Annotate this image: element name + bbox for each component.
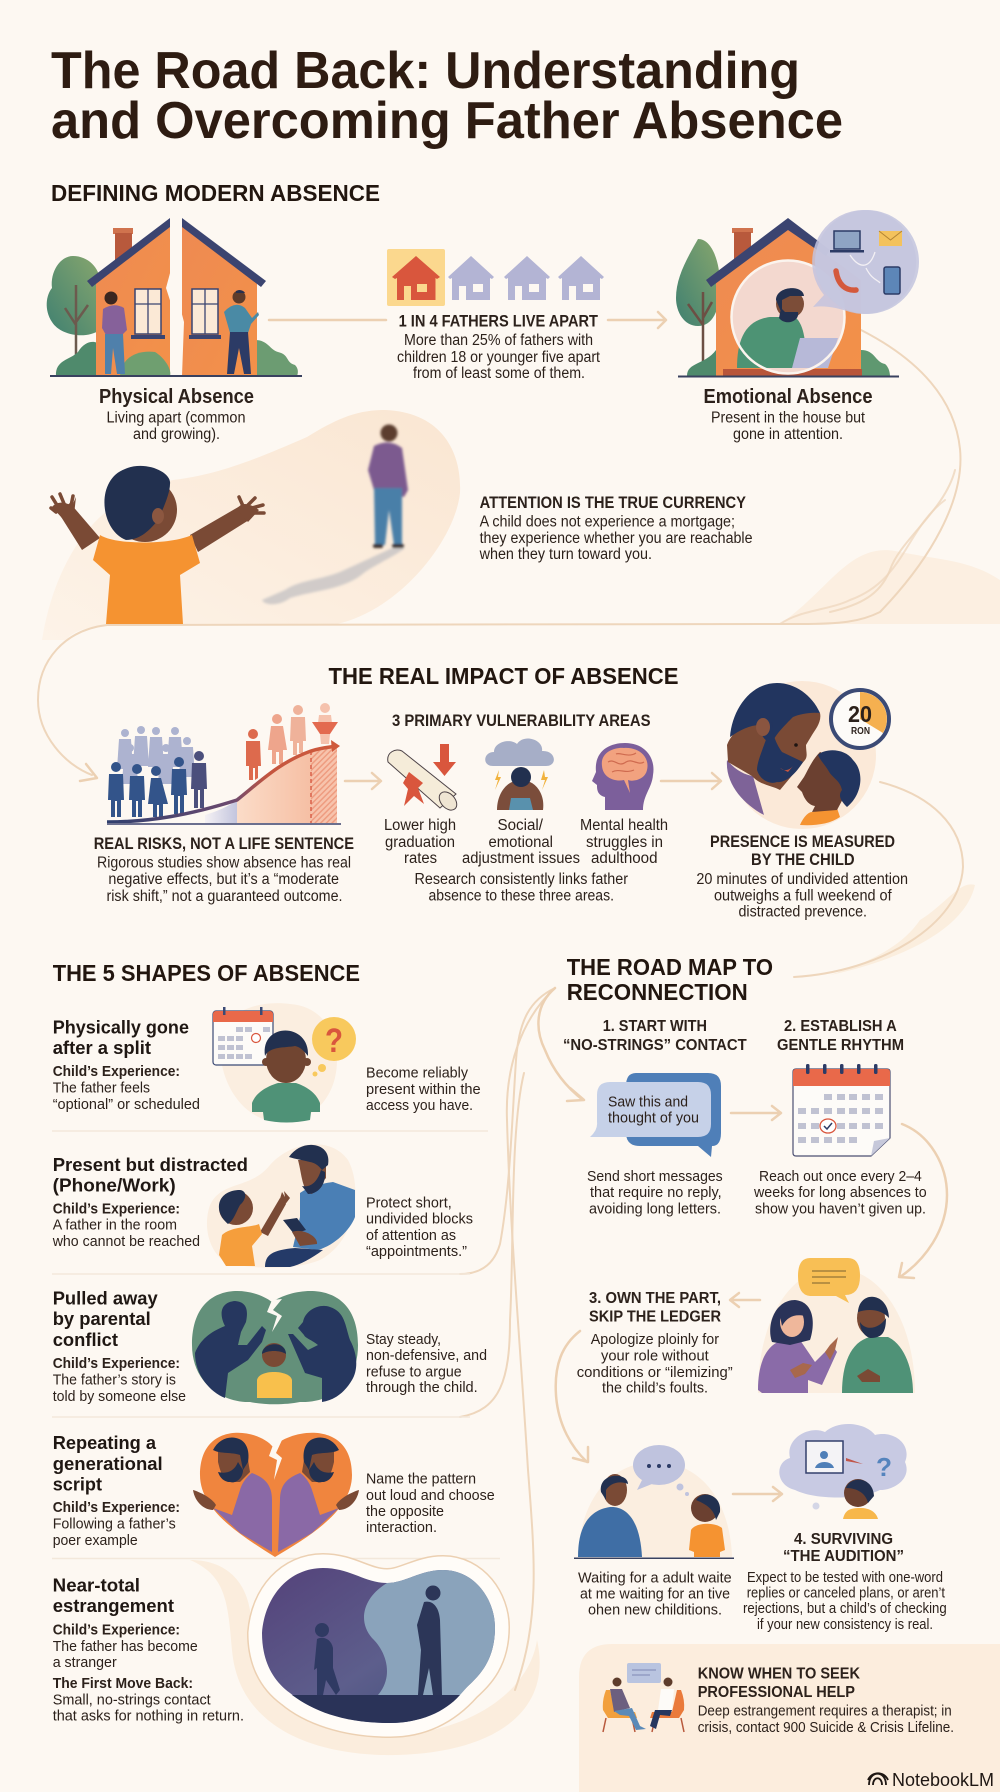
illustration: child reaching [51, 466, 264, 624]
label: emotional absence: gone in attention. [733, 426, 843, 443]
step 3 text: the child’s foults. [602, 1380, 708, 1397]
step 4 text: Expect to be tested with one-word [747, 1570, 943, 1586]
text: shape 3: conflict [53, 1329, 118, 1350]
step 3 [577, 1258, 915, 1397]
text: shape 5 [53, 1575, 244, 1724]
soft background shapes [190, 550, 1000, 1755]
child silhouette [314, 1623, 340, 1695]
step 4 heading [783, 1531, 904, 1565]
text: real risks: risk shift,” not a guaranteed outcome. [106, 888, 342, 905]
person left [102, 292, 127, 374]
thought bubble [312, 1017, 356, 1061]
help text [698, 1666, 954, 1736]
step 3 heading: 3. OWN THE PART, [589, 1290, 721, 1307]
icon: calendar [793, 1064, 890, 1156]
section: real impact [94, 663, 963, 977]
text: shape 1: after a split [53, 1037, 151, 1058]
text: shape 3: Pulled away [53, 1288, 158, 1309]
action text: shape 4 [366, 1470, 495, 1536]
text: shape 4: script [53, 1474, 102, 1494]
action text: shape 3: non-defensive, and [366, 1347, 487, 1364]
waiting text: ohen new childitions. [588, 1602, 722, 1618]
text: shape 2: A father in the room [53, 1217, 177, 1234]
step 4 text: rejections, but a child’s of checking [743, 1601, 947, 1617]
icon: phone [884, 267, 900, 294]
arrow to step 3 text [730, 1293, 760, 1307]
waiting text: Waiting for a adult waite [578, 1569, 732, 1586]
text: shape 3: The father’s story is [53, 1372, 176, 1389]
text: presence measured: 20 minutes of undivided attention [696, 871, 908, 888]
shape 2: present but distracted [52, 1144, 473, 1268]
arrow to step 4 [733, 1487, 782, 1501]
panel: professional help [579, 1644, 1000, 1792]
text: shape 4: generational [53, 1453, 163, 1474]
text: shape 5: Child’s Experience: [53, 1622, 180, 1639]
step 2 text [753, 1168, 927, 1217]
help text: crisis, contact 900 Suicide & Crisis Lifeline. [698, 1720, 954, 1736]
action text: shape 4: the opposite [366, 1503, 444, 1520]
text: presence measured: distracted prevence. [738, 904, 867, 921]
label: physical absence: Physical Absence [99, 386, 254, 408]
text: shape 4 [53, 1432, 180, 1549]
heading: RECONNECTION [567, 979, 748, 1005]
title: The Road Back: Understanding [51, 42, 800, 100]
label: physical absence [99, 386, 254, 443]
labels: vulnerability areas: emotional [488, 834, 553, 851]
illustration: walking away father [262, 424, 408, 604]
action text: shape 4: Name the pattern [366, 1470, 476, 1488]
stat text: More than 25% of fathers with [404, 332, 593, 349]
action text: shape 2: “appointments.” [366, 1243, 467, 1260]
step 2 text: Reach out once every 2–4 [759, 1168, 922, 1185]
illustration: child and calendar: ? [325, 1022, 343, 1060]
stat text: children 18 or younger five apart [397, 349, 601, 366]
shape 5: near-total estrangement [53, 1568, 495, 1724]
front crowd [108, 751, 207, 817]
icon: chat bubbles: Saw this and [608, 1093, 688, 1110]
labels: vulnerability areas: rates [404, 850, 437, 867]
step 2 text: weeks for long absences to [753, 1184, 927, 1201]
label: physical absence: Living apart (common [106, 410, 246, 426]
illustration: arguing parents [192, 1291, 358, 1404]
labels: vulnerability areas: adulthood [591, 850, 658, 867]
illustration: mirrored fathers in heart [193, 1433, 359, 1557]
text: shape 5: that asks for nothing in return. [53, 1707, 244, 1724]
icon: laptop [830, 231, 864, 252]
illustration: child imagining [779, 1424, 907, 1519]
waiting text: at me waiting for an tive [580, 1586, 730, 1603]
action text: shape 3: Stay steady, [366, 1331, 441, 1348]
labels: vulnerability areas: graduation [385, 834, 455, 851]
help text: PROFESSIONAL HELP [698, 1684, 855, 1701]
step 1 heading [563, 1018, 747, 1054]
icon: diploma [388, 744, 460, 813]
step 1 heading: “NO-STRINGS” CONTACT [563, 1037, 747, 1054]
text: shape 5: Near-total [53, 1575, 140, 1596]
road lines through left column [52, 988, 555, 1690]
text: shape 2: Child’s Experience: [53, 1200, 180, 1217]
waiting text [578, 1569, 732, 1618]
text: presence measured: outweighs a full weekend of [714, 888, 892, 905]
arrow to waiting illustration [556, 1331, 588, 1462]
text: shape 4: Following a father’s [53, 1516, 176, 1533]
text: shape 2: (Phone/Work) [53, 1175, 176, 1196]
step 4 [743, 1424, 947, 1633]
waiting illustration and text [574, 1445, 734, 1618]
text: presence measured: PRESENCE IS MEASURED [710, 832, 895, 851]
callout: attention [479, 493, 752, 563]
text: real risks [94, 834, 354, 905]
step 2 heading: 2. ESTABLISH A [784, 1018, 897, 1035]
illustration: father and child waiting [574, 1445, 734, 1559]
step 1 text [587, 1168, 723, 1217]
text: shape 4: Child’s Experience: [53, 1499, 180, 1516]
illustration: bubble house [676, 210, 919, 378]
chart: risk shift curve [107, 703, 341, 825]
step 2 heading [777, 1018, 904, 1054]
step 1 text: that require no reply, [590, 1184, 722, 1201]
step 4 text: if your new consistency is real. [757, 1617, 933, 1633]
illustration: child and calendar [213, 1003, 356, 1122]
illustration: child imagining: ? [876, 1452, 892, 1482]
icon: chat bubbles [590, 1073, 721, 1157]
step 3 heading: SKIP THE LEDGER [589, 1308, 721, 1326]
illustration: father and son with timer: 20 [848, 701, 872, 727]
labels: vulnerability areas: Mental health [580, 817, 668, 834]
section: road map [538, 954, 947, 1633]
step 3 heading [589, 1290, 721, 1326]
connector line [269, 319, 386, 321]
text: presence measured: BY THE CHILD [751, 850, 855, 869]
labels: vulnerability areas: absence to these three areas. [428, 888, 614, 905]
action text: shape 1: Become reliably [366, 1064, 468, 1082]
labels: vulnerability areas: Research consistently links father [414, 871, 628, 888]
labels: vulnerability areas [384, 817, 668, 905]
text: shape 5: The First Move Back: [53, 1675, 193, 1692]
text: shape 2: Present but distracted [53, 1154, 248, 1175]
heading: THE REAL IMPACT OF ABSENCE [328, 663, 678, 689]
stat text [397, 312, 601, 382]
road line to road map [794, 782, 963, 977]
icon: handset [836, 271, 856, 290]
step 1 text: Send short messages [587, 1168, 723, 1185]
text: real risks: Rigorous studies show absence has real [97, 855, 351, 872]
step 1 text: avoiding long letters. [589, 1200, 721, 1217]
text: shape 5: a stranger [53, 1654, 117, 1671]
father silhouette [417, 1586, 442, 1695]
icon: chat bubbles: thought of you [608, 1110, 699, 1127]
action text: shape 1 [366, 1064, 481, 1114]
step 2 [753, 1018, 927, 1217]
text: shape 5: The father has become [53, 1638, 198, 1655]
action text: shape 4: interaction. [366, 1519, 437, 1536]
help text: KNOW WHEN TO SEEK [698, 1666, 860, 1683]
heading: THE 5 SHAPES OF ABSENCE [53, 960, 360, 986]
text: shape 1: “optional” or scheduled [53, 1096, 200, 1113]
action text: shape 3: refuse to argue [366, 1363, 462, 1380]
shape 3: parental conflict [53, 1288, 487, 1405]
text: shape 5: Small, no-strings contact [53, 1692, 211, 1709]
shifted figures [246, 703, 338, 780]
title [51, 42, 843, 150]
action text: shape 2: Protect short, [366, 1194, 452, 1211]
text: shape 2: who cannot be reached [52, 1233, 200, 1250]
title: and Overcoming Father Absence [51, 92, 843, 150]
illustration: father and son with timer [727, 681, 889, 829]
label: physical absence: and growing). [133, 426, 220, 443]
illustration: couple talking [758, 1258, 915, 1393]
action text: shape 1: access you have. [366, 1097, 473, 1114]
section: 5 shapes [52, 960, 495, 1724]
text: shape 3: Child’s Experience: [53, 1355, 180, 1372]
sub heading: 3 PRIMARY VULNERABILITY AREAS [392, 711, 650, 730]
callout: attention: they experience whether you are reachable [480, 530, 752, 547]
action text: shape 2 [366, 1194, 473, 1260]
step 3 text: conditions or “ilemizing” [577, 1364, 733, 1381]
icon row: 1 in 4 houses [387, 249, 604, 306]
icon: storm cloud person [485, 738, 554, 810]
text: shape 1 [53, 1016, 200, 1113]
arrow to emotional absence [608, 312, 666, 328]
text: shape 1: Child’s Experience: [53, 1063, 180, 1080]
labels: vulnerability areas: Social/ [498, 817, 544, 834]
labels: vulnerability areas: adjustment issues [462, 850, 580, 867]
step 1 heading: 1. START WITH [603, 1018, 707, 1035]
shape 1: physically gone [53, 1003, 481, 1122]
icon: head with brain [592, 743, 653, 810]
step 4 heading: “THE AUDITION” [783, 1548, 904, 1565]
shape 4: generational script [53, 1432, 495, 1557]
step 4 heading: 4. SURVIVING [794, 1531, 893, 1548]
text: real risks: negative effects, but it’s a “moderate [108, 871, 339, 888]
text: real risks: REAL RISKS, NOT A LIFE SENTENCE [94, 834, 354, 853]
step 2 heading: GENTLE RHYTHM [777, 1037, 904, 1054]
label: emotional absence: Present in the house but [711, 410, 866, 426]
illustration: split house [47, 218, 302, 377]
arrow into step 1 [538, 988, 584, 1101]
arrow to presence [661, 773, 721, 789]
step 4 text [743, 1570, 947, 1633]
callout: attention: ATTENTION IS THE TRUE CURRENCY [480, 493, 747, 512]
callout: attention: when they turn toward you. [479, 546, 652, 563]
stat text: 1 IN 4 FATHERS LIVE APART [399, 312, 599, 330]
text: shape 3 [53, 1288, 186, 1405]
label: emotional absence [704, 386, 872, 443]
text: shape 2 [52, 1154, 248, 1250]
action text: shape 2: undivided blocks [366, 1211, 473, 1228]
illustration: child and father silhouettes [262, 1568, 495, 1723]
text: shape 4: poer example [53, 1532, 138, 1549]
heading: DEFINING MODERN ABSENCE [51, 180, 380, 206]
arrow to step 3 illustration [899, 1124, 947, 1278]
section: defining modern absence [47, 180, 919, 624]
background blob: reaching child [42, 410, 460, 640]
step 3 text: your role without [601, 1348, 710, 1365]
faded crowd [117, 726, 195, 784]
help text: Deep estrangement requires a therapist; in [698, 1704, 952, 1720]
text: shape 1: Physically gone [53, 1016, 189, 1038]
illustration: father on phone [207, 1144, 355, 1268]
action text: shape 3 [366, 1331, 487, 1396]
action text: shape 2: of attention as [366, 1227, 456, 1244]
heading: THE ROAD MAP TO [567, 954, 773, 980]
action text: shape 4: out loud and choose [366, 1487, 495, 1504]
text: presence measured [696, 832, 908, 921]
label: emotional absence: Emotional Absence [704, 386, 872, 408]
action text: shape 3: through the child. [366, 1379, 478, 1396]
footer: notebooklm logo: NotebookLM [892, 1770, 994, 1790]
step 3 text [577, 1331, 733, 1397]
step 3 text: Apologize ploinly for [591, 1331, 719, 1348]
icon: therapy session [603, 1663, 684, 1732]
step 1 [563, 1018, 747, 1217]
heading [567, 954, 773, 1005]
road line: top section to impact section [38, 330, 960, 781]
text: shape 3: by parental [53, 1308, 151, 1329]
text: shape 1: The father feels [53, 1080, 150, 1097]
arrow to step 2 [731, 1106, 781, 1120]
text: shape 5: estrangement [53, 1595, 174, 1616]
arrow to vulnerability areas [345, 773, 381, 789]
action text: shape 1: present within the [366, 1081, 481, 1098]
stat text: from of least some of them. [413, 365, 585, 382]
step 4 text: replies or canceled plans, or aren’t [747, 1586, 945, 1602]
person right [224, 290, 259, 374]
labels: vulnerability areas: struggles in [586, 834, 663, 851]
illustration: father and son with timer: RON [851, 726, 870, 737]
text: shape 3: told by someone else [53, 1388, 186, 1405]
step 2 text: show you haven’t given up. [755, 1200, 926, 1217]
callout: attention: A child does not experience a mortgage; [480, 514, 735, 530]
icon: envelope [879, 231, 902, 246]
text: shape 4: Repeating a [53, 1432, 157, 1453]
labels: vulnerability areas: Lower high [384, 817, 456, 834]
